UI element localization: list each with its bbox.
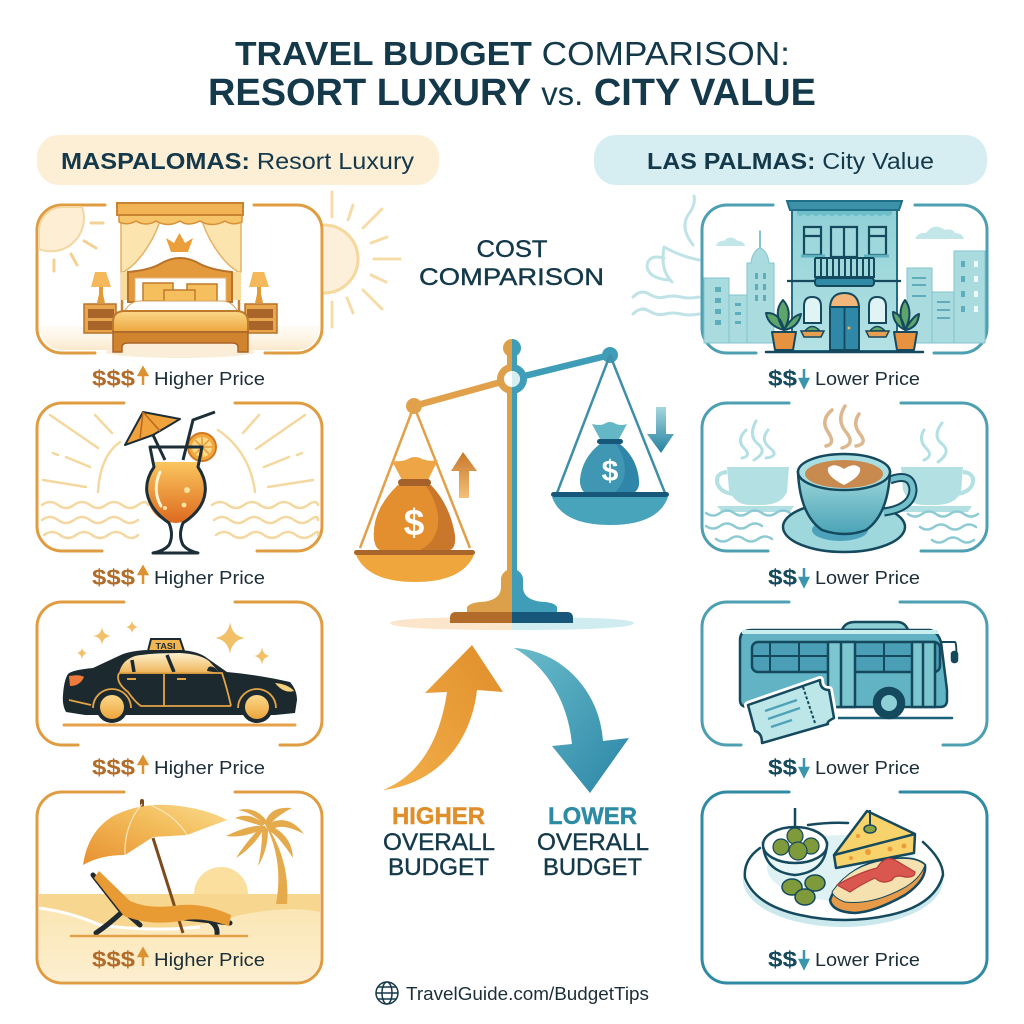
icon: cheese wedge — [834, 810, 915, 868]
ground line — [837, 717, 952, 719]
card frame — [37, 602, 322, 745]
price label: city hotel lower: Lower Price — [815, 368, 920, 389]
ground line — [766, 351, 923, 353]
icon: sparkles — [77, 621, 270, 665]
icon: canopy — [117, 203, 243, 320]
icon: globe — [376, 982, 398, 1004]
text: higher overall budget: OVERALL — [383, 829, 495, 856]
panel: beach — [37, 792, 322, 983]
right pan — [551, 492, 669, 525]
right money bag — [580, 422, 639, 492]
sand dune — [39, 908, 320, 981]
icon: palm tree — [226, 808, 304, 904]
card frame — [702, 403, 987, 551]
icon: nightstands and lamps — [84, 272, 277, 333]
plate shadow — [743, 833, 943, 927]
floor — [40, 326, 319, 350]
heading pill: Las Palmas — [594, 135, 987, 185]
arrow: down — [647, 407, 674, 453]
chart: balance scale — [354, 339, 674, 630]
price label: coffee lower: $$ — [768, 565, 797, 590]
price label: bus lower — [768, 755, 920, 780]
panel: coffee — [702, 403, 987, 552]
decorative sun outside first card — [324, 192, 400, 327]
text: higher overall budget — [383, 803, 495, 881]
price label: coffee lower — [768, 565, 920, 590]
price label: city hotel lower: $$ — [768, 366, 797, 391]
card frame — [702, 205, 987, 353]
icon: orange slice — [188, 433, 216, 461]
icon: ham toast — [830, 858, 925, 913]
arrow: orange rising — [383, 645, 503, 790]
icon: bed — [113, 258, 248, 352]
price label: tapas lower — [768, 947, 920, 972]
price label: bus lower: Lower Price — [815, 757, 920, 778]
title — [208, 35, 816, 114]
icon: latte cup — [783, 454, 913, 552]
ground line — [64, 724, 295, 726]
right pan strings — [557, 355, 665, 493]
text: lower overall budget: BUDGET — [543, 854, 642, 881]
panel: bus — [702, 602, 987, 745]
price label: coffee lower: Lower Price — [815, 567, 920, 588]
price label: cocktail higher: Higher Price — [154, 567, 265, 588]
icon: bus — [740, 622, 957, 718]
heading: cost comparison: COMPARISON — [419, 264, 604, 291]
decorative coffee cup outside first right card — [633, 196, 699, 315]
card frame — [37, 205, 322, 353]
card frame — [702, 602, 987, 745]
panel: luxury hotel — [37, 203, 322, 358]
heading pill: Maspalomas — [37, 135, 439, 185]
scale stand — [467, 345, 512, 612]
skyline — [704, 231, 985, 343]
icon: ticket — [748, 680, 834, 743]
price label: cocktail higher — [92, 565, 265, 590]
price label: cocktail higher: $$$ — [92, 565, 135, 590]
price label: tapas lower: Lower Price — [815, 949, 920, 970]
left pan — [354, 550, 475, 582]
icon: cocktail umbrella — [125, 412, 180, 460]
title: TRAVEL BUDGET COMPARISON: — [235, 35, 790, 72]
icon: taxi car: TASI — [156, 642, 176, 651]
icon: loose olives — [782, 875, 825, 905]
ground line — [71, 935, 247, 937]
price label: hotel higher — [92, 366, 265, 391]
arrow: up — [451, 452, 477, 498]
beam — [414, 379, 512, 406]
background cups — [717, 467, 973, 512]
heading: cost comparison: COST — [476, 236, 548, 263]
card frame — [702, 792, 987, 983]
panel: city hotel — [702, 201, 987, 353]
icon: setting sun — [194, 867, 248, 894]
heading: cost comparison — [419, 236, 604, 291]
left money bag: $ — [404, 502, 425, 543]
scale shadow — [390, 617, 512, 630]
icon: beach umbrella — [83, 801, 227, 933]
text: higher overall budget: HIGHER — [392, 803, 485, 830]
icon: plate — [743, 823, 943, 921]
icon: potted plants — [766, 300, 919, 350]
panel: cocktail — [37, 403, 322, 553]
price label: taxi higher: $$$ — [92, 755, 135, 780]
price label: beach higher: $$$ — [92, 947, 135, 972]
steam and waves — [740, 421, 946, 462]
skyline windows — [715, 261, 965, 325]
brown steam — [825, 406, 863, 448]
text: lower overall budget — [537, 803, 649, 881]
heading pill: Maspalomas: MASPALOMAS: Resort Luxury — [61, 148, 415, 174]
price label: bus lower: $$ — [768, 755, 797, 780]
icon: cocktail glass — [147, 412, 215, 553]
sand band — [39, 894, 320, 981]
icon: crown — [166, 233, 193, 252]
arrow: blue falling — [514, 648, 629, 793]
price label: tapas lower: $$ — [768, 947, 797, 972]
footer link: TravelGuide.com/BudgetTips — [406, 984, 649, 1004]
price label: taxi higher: Higher Price — [154, 757, 265, 778]
card frame — [37, 403, 322, 551]
icon: taxi car — [63, 639, 297, 723]
heading pill: Las Palmas: LAS PALMAS: City Value — [647, 148, 934, 174]
icon: lounge chair — [93, 871, 231, 934]
card frame — [37, 792, 322, 983]
left money bag — [374, 457, 455, 550]
title: RESORT LUXURY vs. CITY VALUE — [208, 72, 816, 114]
price label: hotel higher: $$$ — [92, 366, 135, 391]
text: lower overall budget: OVERALL — [537, 829, 649, 856]
clouds — [716, 227, 964, 246]
text: higher overall budget: BUDGET — [388, 854, 489, 881]
icon: corner sun — [39, 207, 103, 271]
left pan strings — [360, 406, 470, 548]
price label: beach higher — [92, 947, 265, 972]
icon: olive bowl — [763, 808, 827, 875]
panel: tapas — [702, 792, 987, 983]
price label: city hotel lower — [768, 366, 920, 391]
price label: taxi higher — [92, 755, 265, 780]
text: lower overall budget: LOWER — [548, 803, 637, 830]
price label: hotel higher: Higher Price — [154, 368, 265, 389]
right money bag: $ — [602, 455, 619, 488]
panel: taxi — [37, 602, 322, 745]
price label: beach higher: Higher Price — [154, 949, 265, 970]
icon: city building — [787, 201, 902, 351]
sun rays and waves — [42, 415, 318, 538]
